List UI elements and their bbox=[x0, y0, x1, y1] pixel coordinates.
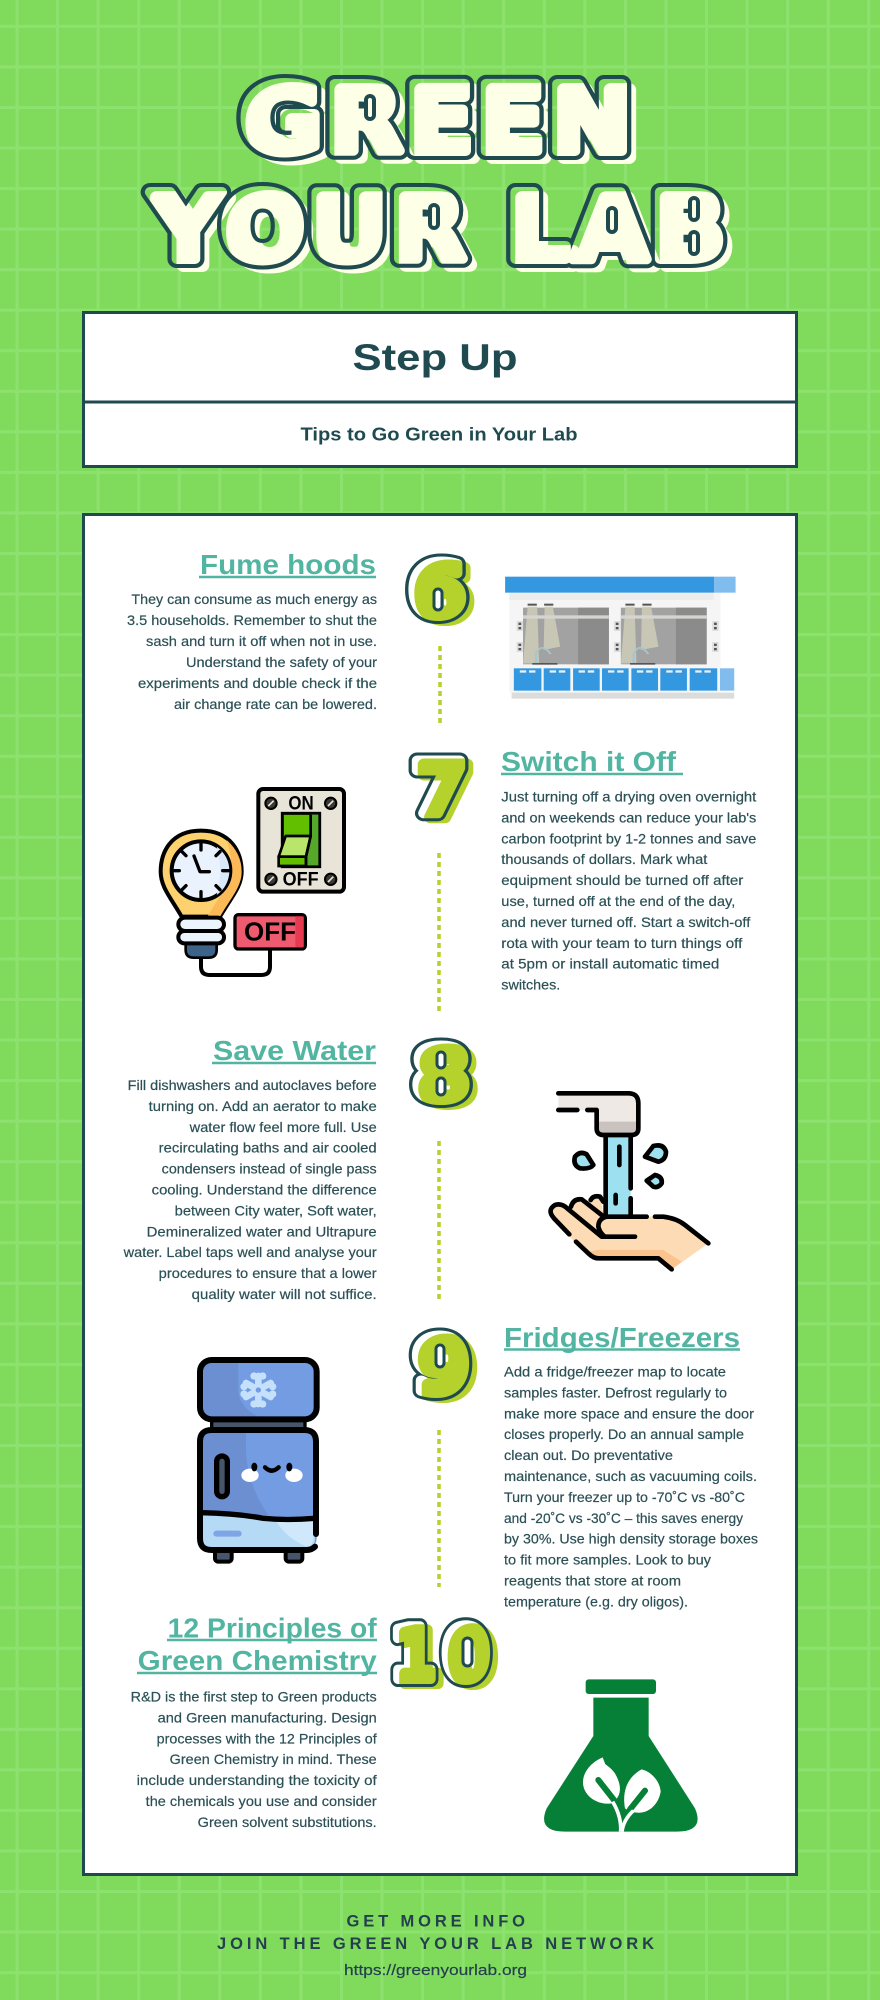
text block: fridges/freezers: closes properly. Do an annual sample bbox=[504, 1426, 744, 1442]
text block: switch it off: and on weekends can reduce your lab's bbox=[501, 809, 756, 825]
text block: save water: water flow feel more full. Use bbox=[189, 1119, 377, 1135]
footer: get more info bbox=[217, 1912, 654, 1979]
text block: 12 principles: the chemicals you use and consider bbox=[146, 1793, 377, 1809]
text block: save water bbox=[123, 1077, 377, 1302]
text block: fume hoods: Understand the safety of your bbox=[186, 654, 377, 670]
text block: switch it off: use, turned off at the end of the day, bbox=[501, 893, 735, 909]
text block: switch it off: Just turning off a drying oven overnight bbox=[501, 788, 756, 804]
text block: switch it off bbox=[501, 788, 757, 993]
text block: 12 principles: Green solvent substitutions. bbox=[198, 1814, 377, 1830]
footer: get more info: JOIN THE GREEN YOUR LAB NETWORK bbox=[217, 1935, 654, 1953]
text block: save water: recirculating baths and air cooled bbox=[159, 1140, 377, 1156]
text block: switch it off: carbon footprint by 1-2 tonnes and save bbox=[501, 830, 757, 846]
footer: get more info: https://greenyourlab.org bbox=[344, 1962, 527, 1979]
text block: save water: water. Label taps well and analyse your bbox=[123, 1244, 377, 1260]
title: Green Your Lab: GREEN bbox=[248, 72, 642, 179]
text block: save water: between City water, Soft water, bbox=[175, 1202, 377, 1218]
text block: switch it off: equipment should be turned off after bbox=[501, 872, 744, 888]
icon: fridge freezer bbox=[200, 1360, 317, 1562]
text block: fridges/freezers: Turn your freezer up to -70˚C vs -80˚C bbox=[504, 1489, 745, 1505]
text block: fridges/freezers: to fit more samples. Look to buy bbox=[504, 1552, 711, 1568]
text block: 12 principles: include understanding the toxicity of bbox=[137, 1772, 377, 1788]
heading: 12 principles of green chemistry bbox=[137, 1612, 377, 1676]
icon: bulb clock and off switch bbox=[161, 789, 344, 975]
icon: bulb clock and off switch: OFF bbox=[283, 870, 319, 891]
text block: 12 principles: and Green manufacturing. Design bbox=[158, 1709, 377, 1725]
number 7: 7 bbox=[419, 750, 473, 834]
panel: main tips card bbox=[84, 514, 796, 1874]
heading: fridges/freezers: Fridges/Freezers bbox=[504, 1322, 740, 1353]
number 7 bbox=[408, 752, 474, 824]
text block: save water: quality water will not suffice. bbox=[192, 1286, 377, 1302]
title: Green Your Lab bbox=[140, 74, 732, 274]
icon: green chemistry flask bbox=[544, 1679, 698, 1832]
text block: switch it off: rota with your team to turn things off bbox=[501, 935, 742, 951]
text block: save water: Demineralized water and Ultrapure bbox=[147, 1223, 377, 1239]
text block: fridges/freezers: temperature (e.g. dry oligos). bbox=[504, 1593, 688, 1609]
heading: 12 principles of green chemistry: 12 Principles of bbox=[168, 1612, 377, 1644]
text block: switch it off: thousands of dollars. Mark what bbox=[501, 851, 707, 867]
number 8 bbox=[408, 1038, 478, 1110]
icon: bulb clock and off switch: OFF bbox=[244, 916, 296, 946]
text block: save water: Fill dishwashers and autoclaves before bbox=[128, 1077, 377, 1093]
text block: fume hoods: They can consume as much energy as bbox=[131, 591, 377, 607]
panel: step up header bbox=[83, 312, 797, 466]
text block: fridges/freezers: reagents that store at room bbox=[504, 1572, 681, 1588]
heading: fume hoods: Fume hoods bbox=[200, 549, 376, 580]
icon: fume hood bbox=[505, 577, 736, 699]
panel: step up header: Step Up bbox=[352, 337, 518, 378]
text block: save water: procedures to ensure that a lower bbox=[159, 1265, 377, 1281]
text block: switch it off: switches. bbox=[501, 977, 560, 993]
text block: 12 principles: Green Chemistry in mind. These bbox=[170, 1751, 377, 1767]
text block: 12 principles: processes with the 12 Principles of bbox=[157, 1730, 377, 1746]
text block: fume hoods bbox=[127, 591, 377, 712]
footer: get more info: GET MORE INFO bbox=[346, 1912, 525, 1930]
text block: save water: cooling. Understand the difference bbox=[152, 1182, 377, 1198]
number 6: 6 bbox=[416, 552, 472, 636]
heading: 12 principles of green chemistry: Green Chemistry bbox=[138, 1645, 377, 1676]
title: Green Your Lab: YOUR LAB bbox=[157, 180, 736, 287]
text block: fume hoods: sash and turn it off when not in use. bbox=[146, 633, 377, 649]
icon: bulb clock and off switch: ON bbox=[288, 793, 314, 814]
text block: fume hoods: 3.5 households. Remember to shut the bbox=[127, 612, 377, 628]
text block: fridges/freezers bbox=[504, 1364, 758, 1609]
text block: fridges/freezers: and -20˚C vs -30˚C – this saves energy bbox=[504, 1510, 743, 1526]
text block: switch it off: at 5pm or install automatic timed bbox=[501, 956, 719, 972]
text block: 12 principles bbox=[131, 1688, 377, 1830]
text block: fume hoods: experiments and double check if the bbox=[138, 675, 377, 691]
number 9 bbox=[408, 1328, 478, 1403]
heading: switch it off: Switch it Off bbox=[501, 746, 677, 777]
text block: save water: condensers instead of single pass bbox=[162, 1161, 377, 1177]
text block: 12 principles: R&D is the first step to Green products bbox=[131, 1688, 377, 1704]
text block: fume hoods: air change rate can be lowered. bbox=[174, 696, 377, 712]
heading: save water: Save Water bbox=[213, 1035, 376, 1066]
icon: tap and hand bbox=[551, 1093, 708, 1269]
number 10: 10 bbox=[397, 1616, 503, 1700]
number 9: 9 bbox=[420, 1325, 476, 1414]
text block: fridges/freezers: maintenance, such as vacuuming coils. bbox=[504, 1468, 757, 1484]
text block: fridges/freezers: Add a fridge/freezer map to locate bbox=[504, 1364, 726, 1380]
panel: step up header: Tips to Go Green in Your Lab bbox=[300, 424, 578, 444]
text block: fridges/freezers: clean out. Do preventative bbox=[504, 1447, 673, 1463]
text block: save water: turning on. Add an aerator to make bbox=[149, 1098, 377, 1114]
number 8: 8 bbox=[420, 1036, 476, 1120]
text block: fridges/freezers: samples faster. Defrost regularly to bbox=[504, 1384, 727, 1400]
number 6 bbox=[405, 554, 474, 626]
text block: fridges/freezers: make more space and ensure the door bbox=[504, 1405, 754, 1421]
text block: switch it off: and never turned off. Start a switch-off bbox=[501, 914, 750, 930]
text block: fridges/freezers: by 30%. Use high density storage boxes bbox=[504, 1531, 758, 1547]
